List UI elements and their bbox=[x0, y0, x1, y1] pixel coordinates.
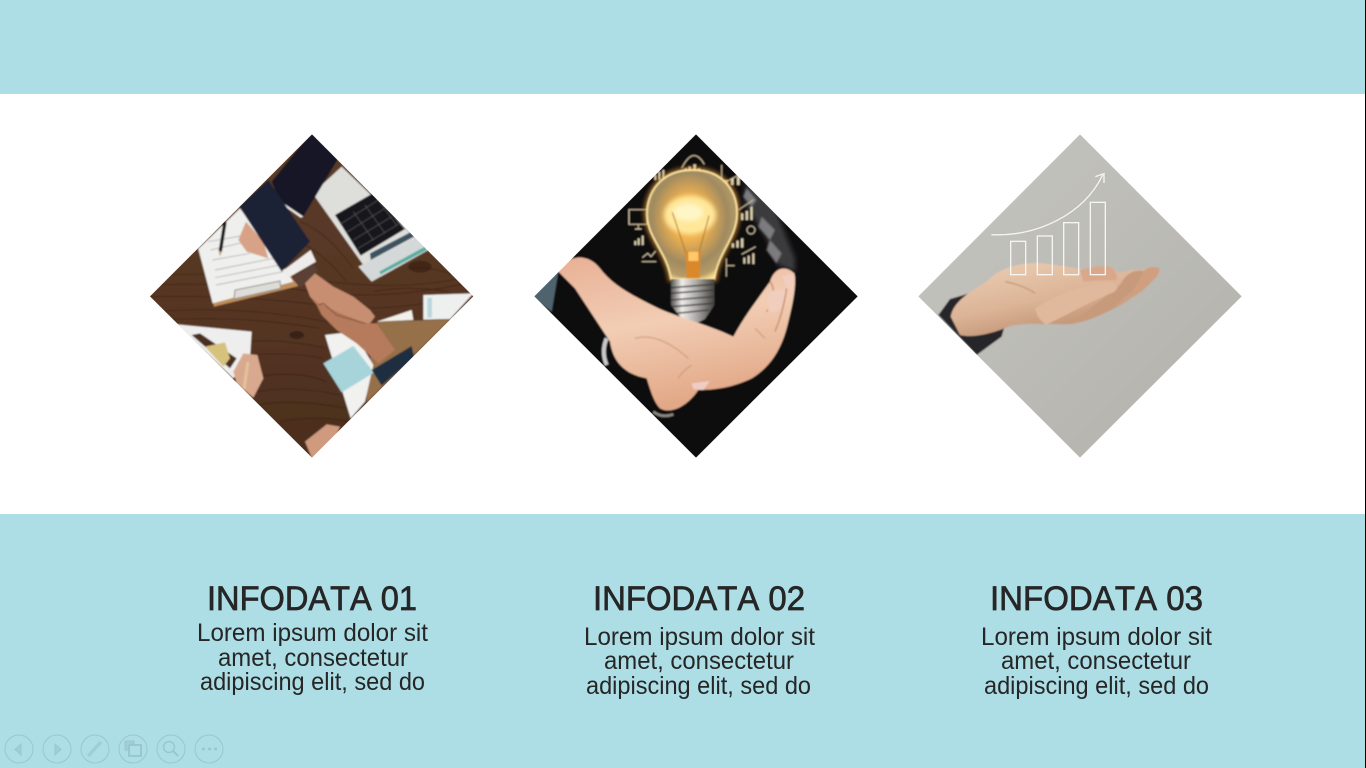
column 1 text bbox=[197, 580, 428, 696]
photo diamond: light bulb on hand bbox=[532, 132, 862, 462]
suit sleeves bbox=[272, 132, 338, 217]
heading 1: INFODATA 01 bbox=[207, 580, 417, 618]
icon: next bbox=[43, 735, 71, 763]
clipboard and contract bbox=[212, 267, 299, 308]
lower left hand and paper bbox=[177, 324, 252, 378]
background: bottom band bbox=[0, 514, 1366, 768]
right edge line bbox=[1365, 0, 1366, 768]
icon: previous bbox=[5, 735, 33, 763]
description 3: adipiscing elit, sed do bbox=[984, 672, 1209, 700]
description 1: Lorem ipsum dolor sit bbox=[197, 619, 428, 647]
photo diamond: business handshake bbox=[147, 132, 477, 462]
description 1 bbox=[197, 619, 428, 696]
pen bbox=[219, 222, 227, 252]
open hand bbox=[558, 257, 795, 410]
column 3 text bbox=[981, 580, 1212, 700]
shaking hands bbox=[310, 297, 395, 363]
icon: slides bbox=[119, 735, 147, 763]
icon: more bbox=[195, 735, 223, 763]
description 2 bbox=[584, 623, 815, 700]
description 3 bbox=[981, 623, 1212, 700]
description 3: Lorem ipsum dolor sit bbox=[981, 623, 1212, 651]
background: top band bbox=[0, 0, 1366, 94]
growth arrow bbox=[991, 174, 1104, 235]
description 2: amet, consectetur bbox=[604, 647, 794, 675]
description 3: amet, consectetur bbox=[1001, 647, 1191, 675]
heading 3: INFODATA 03 bbox=[990, 580, 1203, 618]
heading 2: INFODATA 02 bbox=[593, 580, 805, 618]
palm and fingers bbox=[951, 263, 1159, 336]
growth bars bbox=[991, 174, 1105, 275]
slideshow toolbar bbox=[5, 735, 223, 763]
cuff details bbox=[604, 338, 607, 365]
description 2: Lorem ipsum dolor sit bbox=[584, 623, 815, 651]
chart doodles bbox=[629, 156, 756, 277]
dark suit background bbox=[532, 132, 862, 462]
bulb glow bbox=[647, 170, 737, 279]
icon: pen bbox=[81, 735, 109, 763]
description 1: amet, consectetur bbox=[218, 644, 408, 672]
description 1: adipiscing elit, sed do bbox=[200, 668, 425, 696]
photo diamond: hand holding growth chart bbox=[917, 132, 1247, 462]
lower hand bbox=[305, 424, 340, 458]
wood table bbox=[147, 132, 477, 462]
icon: magnifier bbox=[157, 735, 185, 763]
grey background bbox=[917, 132, 1247, 462]
description 2: adipiscing elit, sed do bbox=[586, 672, 811, 700]
watch strap bbox=[938, 294, 1004, 355]
right side papers and folder bbox=[423, 293, 473, 320]
bulb screw base bbox=[671, 279, 714, 325]
laptop bbox=[313, 167, 427, 265]
bulb glass bbox=[647, 170, 737, 279]
column 2 text bbox=[584, 580, 815, 700]
